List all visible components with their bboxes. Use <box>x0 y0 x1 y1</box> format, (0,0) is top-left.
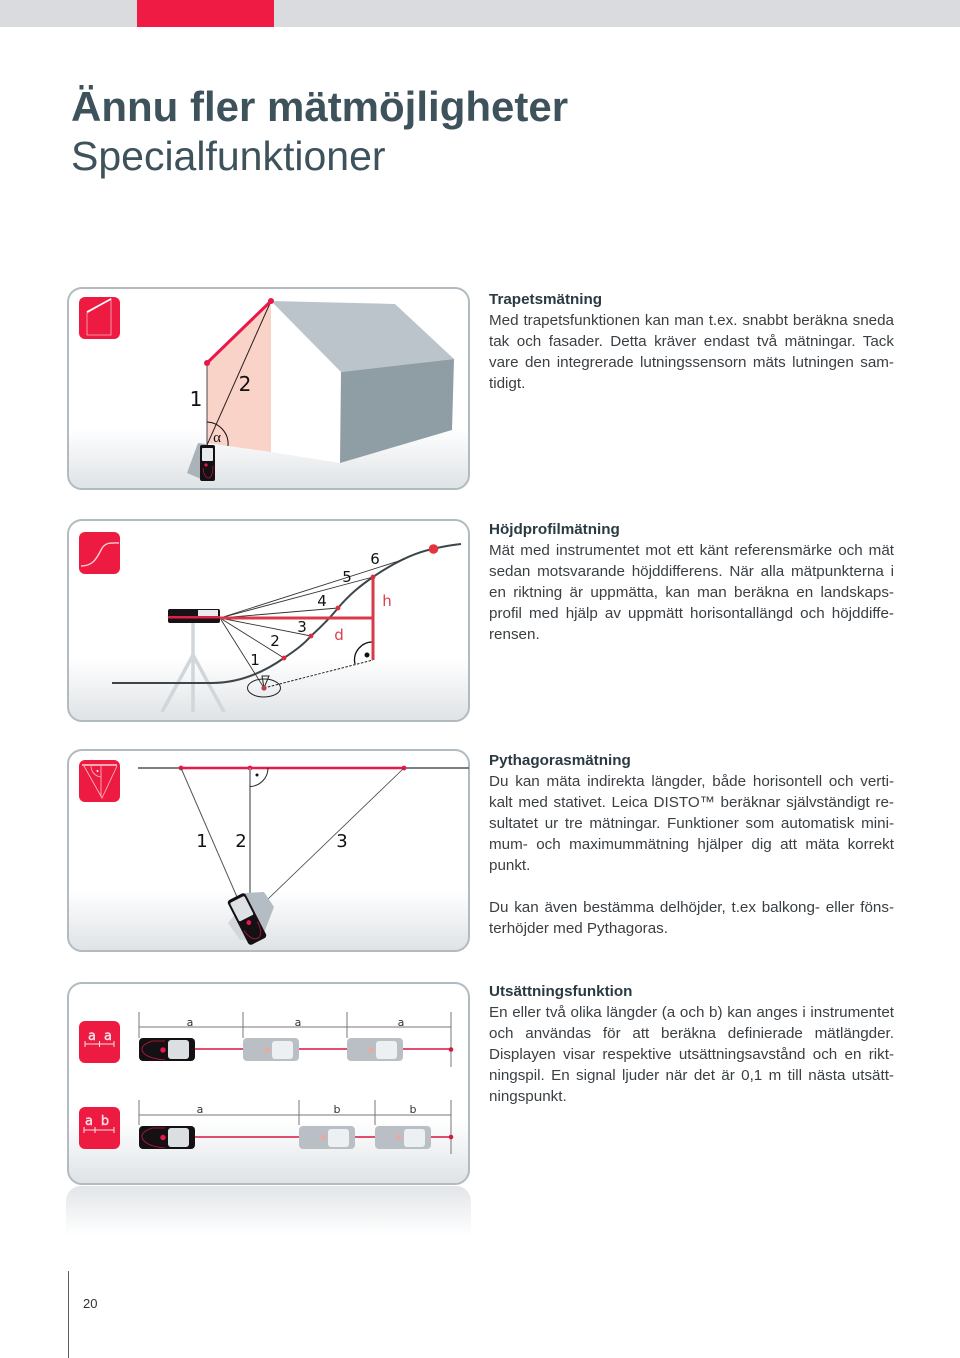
page number rule <box>68 1271 69 1358</box>
diagram: hojdprofil: 6 <box>370 550 380 568</box>
panel: hojdprofil background <box>67 519 470 722</box>
icon: a a <box>79 1021 120 1063</box>
text: Pythagorasmätning: punkt. <box>489 857 530 874</box>
diagram: trapets house: α <box>213 430 221 446</box>
text: Höjdprofilmätning: rensen. <box>489 626 540 643</box>
text: Utsättningsfunktion: Displayen visar respektive utsättningsavstånd och en rikt- <box>489 1046 894 1063</box>
text: Höjdprofilmätning: Mät med instrumentet mot ett känt referensmärke och mät <box>489 542 894 559</box>
title: Specialfunktioner <box>71 133 386 179</box>
device: trapets <box>187 443 215 481</box>
diagram: utsattning row a a a <box>139 1012 453 1067</box>
text: Trapetsmätning <box>489 291 894 392</box>
text: Utsättningsfunktion: ningspunkt. <box>489 1088 567 1105</box>
icon: trapets <box>79 297 120 339</box>
diagram: utsattning row a b b: b <box>334 1103 341 1116</box>
icon: a b <box>79 1107 120 1149</box>
diagram: hojdprofil: h <box>382 592 392 610</box>
diagram: hojdprofil <box>112 544 461 712</box>
diagram: hojdprofil: 5 <box>342 568 352 586</box>
text: Trapetsmätning: tidigt. <box>489 375 525 392</box>
text: Trapetsmätning: tak och fasader. Detta kräver endast två mätningar. Tack <box>489 333 894 350</box>
panel reflection <box>66 1186 471 1236</box>
page number: 20 <box>83 1296 97 1311</box>
device: hojdprofil <box>168 609 220 623</box>
panel: trapets background <box>67 287 470 490</box>
text: Utsättningsfunktion: En eller två olika längder (a och b) kan anges i instrumentet <box>489 1004 894 1021</box>
diagram: trapets house: 2 <box>239 372 251 396</box>
text: Höjdprofilmätning: en riktning är uppmätta, kan man beräkna en landskaps- <box>489 584 894 601</box>
diagram: pythagoras: 1 <box>196 831 208 852</box>
text: Höjdprofilmätning <box>489 521 894 643</box>
diagram: utsattning row a b b: a <box>197 1103 203 1116</box>
diagram: pythagoras: 3 <box>336 831 348 852</box>
text: Höjdprofilmätning: sedan motsvarande höjddifferens. När alla mätpunkterna i <box>489 563 894 580</box>
text: Pythagorasmätning: mum- och maximummätning hjälper dig att mäta korrekt <box>489 836 894 853</box>
diagram: utsattning row a a a: a <box>295 1016 301 1029</box>
icon: a a: a <box>104 1029 112 1044</box>
text: Pythagorasmätning: Du kan mäta indirekta längder, både horisontell och verti- <box>489 773 894 790</box>
text: Utsättningsfunktion <box>489 983 894 1105</box>
icon: pythagoras <box>79 760 120 802</box>
title: Ännu fler mätmöjligheter <box>71 83 568 130</box>
diagram: utsattning row a b b <box>139 1100 453 1154</box>
diagram: hojdprofil: 2 <box>270 632 280 650</box>
diagram: trapets house: 1 <box>190 387 202 411</box>
text: Trapetsmätning: Med trapetsfunktionen kan man t.ex. snabbt beräkna sneda <box>489 312 894 329</box>
diagram: trapets house <box>190 298 454 463</box>
device: pythagoras <box>227 892 274 946</box>
text: Höjdprofilmätning: profil med hjälp av uppmätt horisontallängd och höjddiffe- <box>489 605 894 622</box>
diagram: hojdprofil: 4 <box>317 592 327 610</box>
text: Pythagorasmätning <box>489 752 894 937</box>
diagram: utsattning row a a a: a <box>398 1016 404 1029</box>
diagram: pythagoras: 2 <box>235 831 247 852</box>
diagram: pythagoras <box>138 766 469 899</box>
diagram: utsattning row a b b: b <box>410 1103 417 1116</box>
text: Utsättningsfunktion: och användas för att beräkna definierade mätlängder. <box>489 1025 894 1042</box>
panel: utsattning background <box>67 982 470 1185</box>
text: Höjdprofilmätning: Höjdprofilmätning <box>489 521 620 538</box>
diagram: hojdprofil: 3 <box>297 618 307 636</box>
title <box>71 83 568 179</box>
icon: hojdprofil <box>79 532 120 574</box>
diagram: utsattning row a a a: a <box>187 1016 193 1029</box>
text: Pythagorasmätning: Du kan även bestämma delhöjder, t.ex balkong- eller föns- <box>489 899 894 916</box>
text: Trapetsmätning: vare den integrerade lutningssensorn mäts lutningen sam- <box>489 354 894 371</box>
text: Pythagorasmätning: sultatet ur tre mätningar. Funktioner som automatisk mini- <box>489 815 894 832</box>
icon: a b: b <box>101 1114 109 1129</box>
icon: a a: a <box>88 1029 96 1044</box>
diagram: hojdprofil: 1 <box>250 651 260 669</box>
panel: pythagoras background <box>67 749 470 952</box>
text: Trapetsmätning: Trapetsmätning <box>489 291 602 308</box>
text: Utsättningsfunktion: ningspil. En signal ljuder när det är 0,1 m till nästa utsätt- <box>489 1067 894 1084</box>
diagram: hojdprofil: d <box>334 626 344 644</box>
text: Pythagorasmätning: terhöjder med Pythagoras. <box>489 920 668 937</box>
text: Pythagorasmätning: Pythagorasmätning <box>489 752 631 769</box>
top bar <box>0 0 960 27</box>
text: Utsättningsfunktion: Utsättningsfunktion <box>489 983 632 1000</box>
icon: a b: a <box>85 1114 93 1129</box>
text: Pythagorasmätning: kalt med stativet. Leica DISTO™ beräknar självständigt re- <box>489 794 894 811</box>
